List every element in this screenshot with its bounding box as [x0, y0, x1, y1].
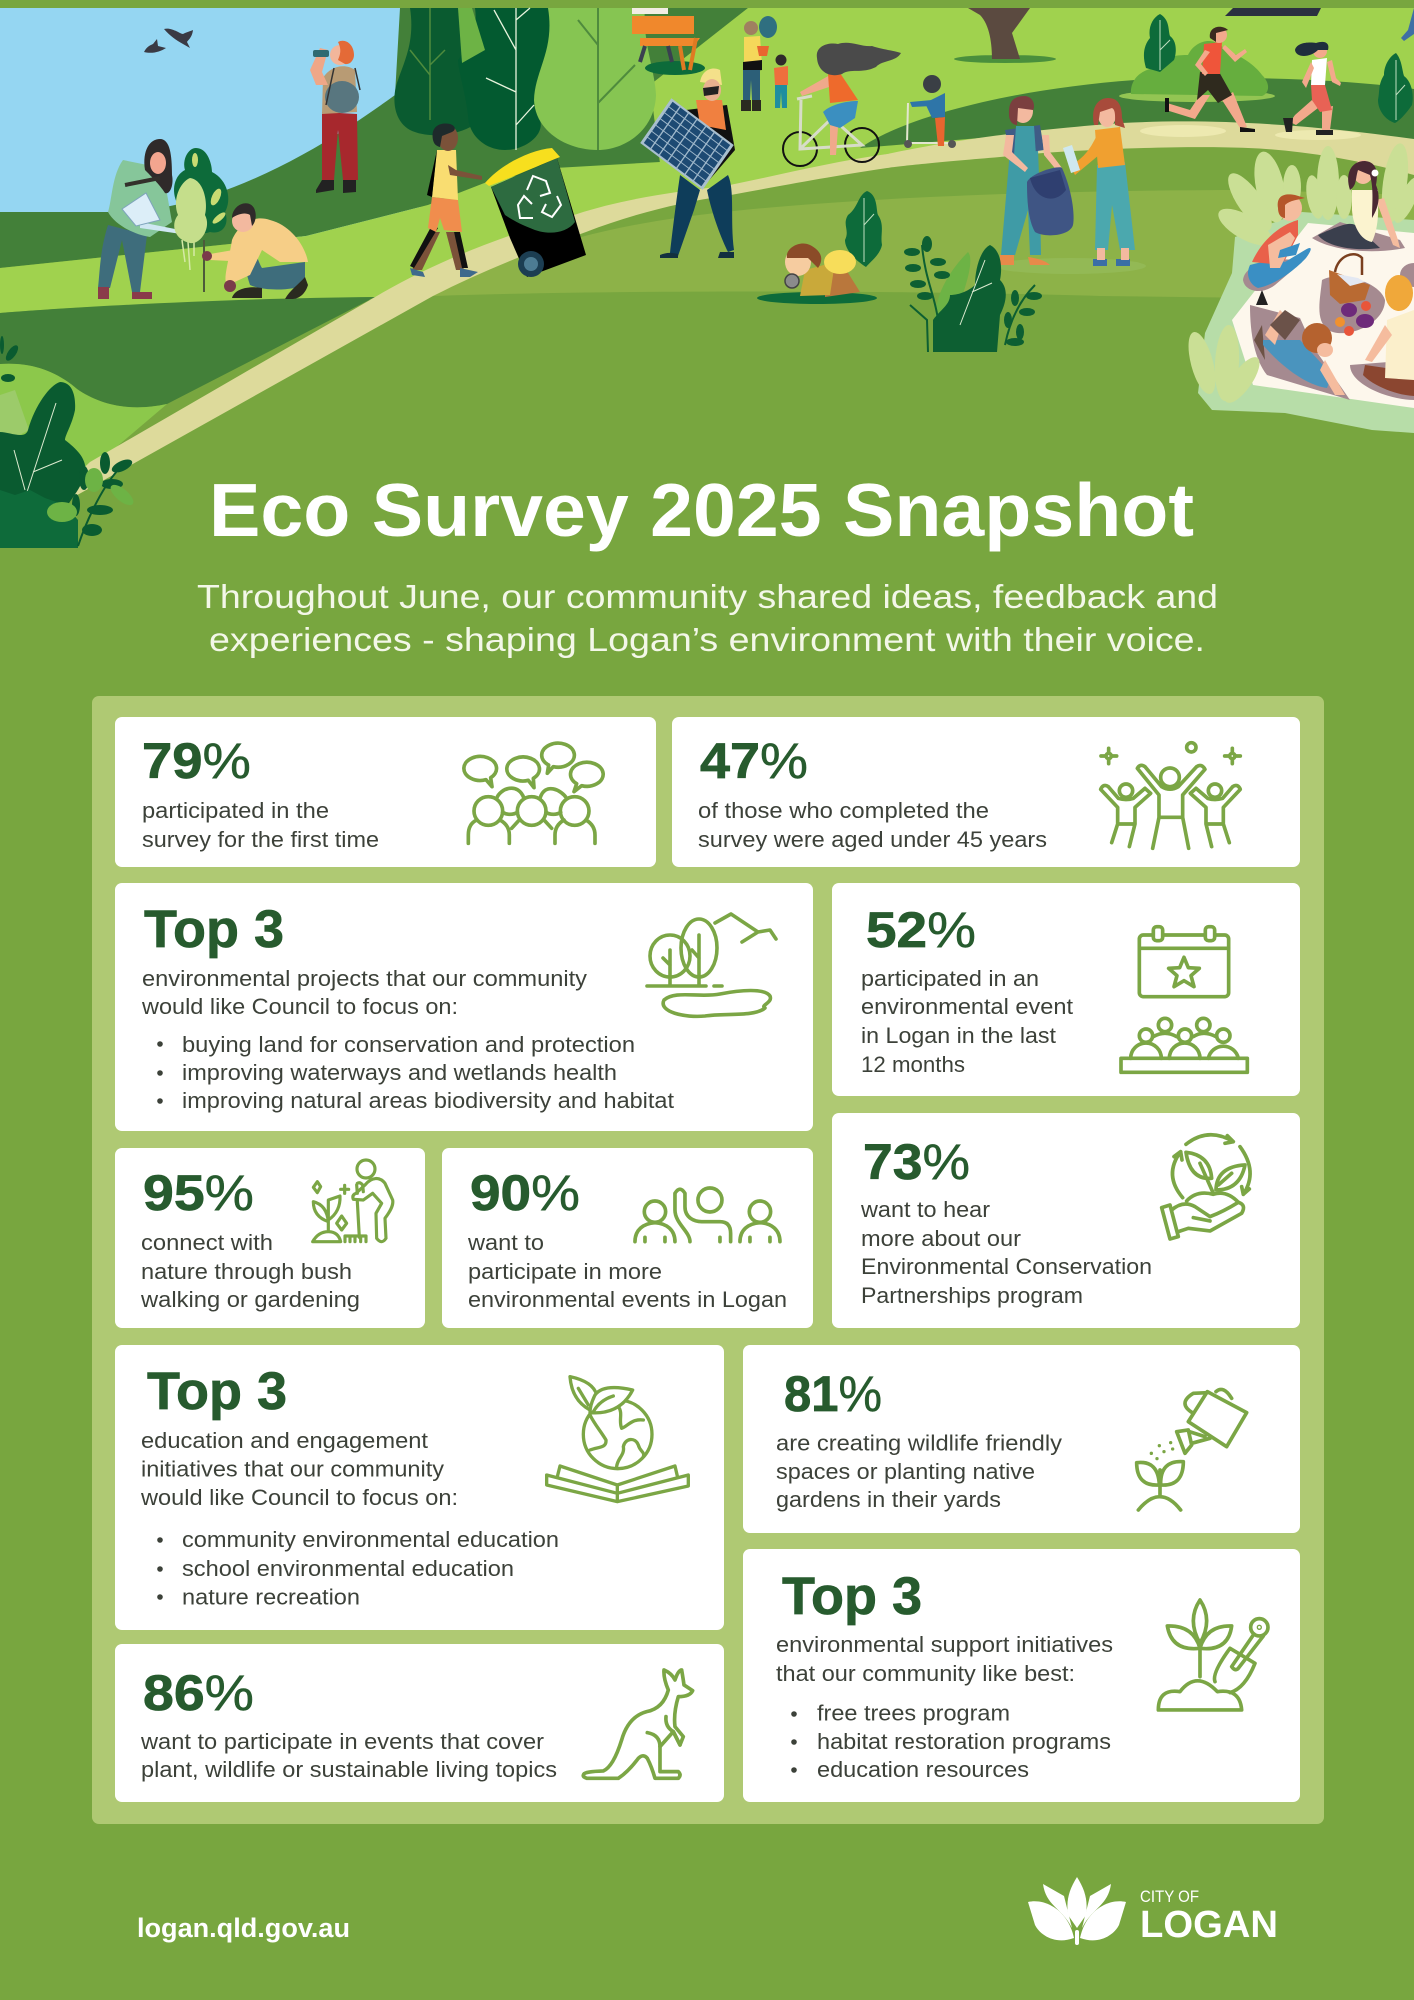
icon: calendar and audience	[1121, 927, 1247, 1072]
card: 52%: in Logan in the last	[861, 1023, 1057, 1048]
card: 52%	[832, 883, 1300, 1096]
card: top 3 environmental projects: would like Council to focus on:	[141, 994, 458, 1019]
card: top 3 environmental projects: improving waterways and wetlands health	[182, 1060, 617, 1085]
sky	[0, 8, 420, 238]
card: 52%: 12 months	[861, 1052, 965, 1077]
illustration: park scene	[0, 0, 1414, 548]
card: 90%: want to	[467, 1230, 544, 1255]
card: 81%	[743, 1345, 1300, 1533]
family with potted plant	[741, 16, 788, 111]
card: top 3 support initiatives: free trees program	[817, 1700, 1010, 1726]
logo: City of Logan: LOGAN	[1140, 1904, 1278, 1946]
card: top 3 education initiatives: school environmental education	[182, 1556, 514, 1581]
icon: celebrating people	[1101, 743, 1240, 848]
card: 52%: environmental event	[861, 994, 1074, 1019]
card: top 3 education initiatives: education and engagement	[141, 1428, 429, 1453]
icon: crowd with speech bubbles	[464, 743, 603, 843]
card: 79%: participated in the	[142, 798, 329, 823]
card: 73%: Partnerships program	[861, 1283, 1083, 1308]
card: top 3 education initiatives: nature recreation	[182, 1584, 360, 1610]
card: 73%: more about our	[861, 1226, 1022, 1251]
bench	[632, 8, 705, 75]
tree trunk	[954, 8, 1321, 63]
inline skater	[1275, 42, 1361, 140]
bush behind runner	[1119, 14, 1275, 102]
foliage centre	[904, 236, 1042, 352]
card: 95%: 95%	[143, 1165, 254, 1221]
card: top 3 support initiatives	[743, 1549, 1300, 1802]
card: 73%: 73%	[863, 1134, 970, 1190]
icon: seedling and trowel	[1158, 1600, 1268, 1710]
card: 95%: walking or gardening	[140, 1287, 360, 1312]
dark band right	[860, 78, 1414, 148]
icon: watering can and sprout	[1137, 1389, 1247, 1510]
card: top 3 environmental projects: environmental projects that our community	[142, 966, 588, 991]
panel: statistics	[92, 696, 1324, 1824]
card: 79%	[115, 717, 656, 867]
card: 73%: Environmental Conservation	[861, 1254, 1152, 1279]
person: carrying solar panel	[642, 68, 735, 258]
person: watering	[98, 139, 194, 299]
child on scooter	[904, 75, 956, 148]
card: 95%: nature through bush	[141, 1259, 352, 1284]
card: 81%: 81%	[784, 1366, 882, 1422]
card: top 3 environmental projects: improving natural areas biodiversity and habitat	[182, 1088, 675, 1113]
person: child pulling bin	[410, 123, 482, 277]
card: 90%	[442, 1148, 813, 1328]
footpath	[50, 121, 1414, 503]
card: 86%: plant, wildlife or sustainable living topics	[141, 1757, 557, 1782]
card: 47%: of those who completed the	[698, 798, 989, 823]
subtitle: experiences - shaping Logan’s environment with their voice.	[209, 621, 1205, 658]
icon: person gardening	[313, 1160, 393, 1242]
card: 79%: survey for the first time	[142, 827, 379, 852]
card: top 3 support initiatives: Top 3	[782, 1567, 922, 1626]
birds	[144, 29, 193, 53]
card: top 3 education initiatives	[115, 1345, 724, 1630]
olive slope	[433, 190, 1414, 300]
card: 79%: 79%	[142, 733, 251, 789]
subtitle	[197, 578, 1218, 658]
card: top 3 support initiatives: environmental support initiatives	[776, 1632, 1113, 1657]
people collecting litter	[994, 96, 1146, 274]
logo: City of Logan: CITY OF	[1140, 1887, 1199, 1906]
card: 47%	[672, 717, 1300, 867]
person: hiker with binoculars	[310, 41, 360, 193]
child with magnifying glass	[757, 191, 882, 304]
card: 73%: want to hear	[860, 1197, 991, 1222]
trees	[394, 8, 656, 150]
picnic	[1183, 142, 1414, 433]
card: 90%: participate in more	[468, 1259, 662, 1284]
card: 81%: are creating wildlife friendly	[776, 1430, 1063, 1456]
card: 95%: connect with	[141, 1230, 273, 1255]
lime meadow	[0, 8, 1414, 313]
foliage bottom left	[0, 336, 137, 548]
subtitle: Throughout June, our community shared ideas, feedback and	[197, 578, 1218, 615]
card: top 3 support initiatives: that our community like best:	[776, 1661, 1075, 1686]
top strip	[0, 0, 1414, 8]
card: 95%	[115, 1148, 425, 1328]
runner	[1140, 27, 1255, 137]
card: 90%: environmental events in Logan	[468, 1287, 787, 1312]
card: 47%: survey were aged under 45 years	[698, 827, 1047, 852]
person: planting	[202, 203, 308, 299]
dark hill	[0, 8, 748, 268]
dark lower left hill	[0, 297, 375, 407]
icon: globe on open book	[547, 1377, 688, 1502]
card: 86%	[115, 1644, 724, 1802]
card: top 3 support initiatives: education resources	[817, 1757, 1029, 1782]
card: 52%: participated in an	[861, 966, 1039, 991]
card: 73%	[832, 1113, 1300, 1328]
card: 47%: 47%	[700, 733, 808, 789]
card: 90%: 90%	[470, 1165, 580, 1221]
card: top 3 environmental projects	[115, 883, 813, 1131]
card: top 3 education initiatives: community environmental education	[182, 1527, 559, 1552]
icon: people raising hand	[635, 1188, 780, 1242]
leaf right	[1378, 8, 1414, 123]
card: top 3 environmental projects: Top 3	[144, 900, 284, 959]
recycling bin	[485, 148, 586, 277]
card: 86%: 86%	[143, 1665, 254, 1721]
card: 81%: spaces or planting native	[776, 1459, 1035, 1484]
card: 81%: gardens in their yards	[776, 1487, 1001, 1512]
card: top 3 education initiatives: initiatives that our community	[141, 1456, 445, 1482]
card: top 3 education initiatives: would like Council to focus on:	[140, 1485, 458, 1510]
card: top 3 environmental projects: buying land for conservation and protection	[182, 1032, 635, 1057]
card: 52%: 52%	[866, 902, 976, 958]
bright lime lower left	[0, 364, 167, 548]
title: Eco Survey 2025 Snapshot	[209, 468, 1194, 552]
icon: hand holding seedling	[1162, 1135, 1250, 1239]
card: 86%: want to participate in events that cover	[140, 1729, 545, 1754]
icon: kangaroo	[583, 1670, 693, 1778]
logo: City of Logan	[1028, 1877, 1278, 1946]
sapling	[174, 148, 228, 292]
card: top 3 support initiatives: habitat restoration programs	[817, 1729, 1111, 1754]
card: top 3 education initiatives: Top 3	[147, 1362, 287, 1421]
icon: trees, mountain and pond	[647, 914, 776, 1016]
footer website: logan.qld.gov.au	[137, 1913, 350, 1943]
cyclist	[783, 43, 901, 166]
